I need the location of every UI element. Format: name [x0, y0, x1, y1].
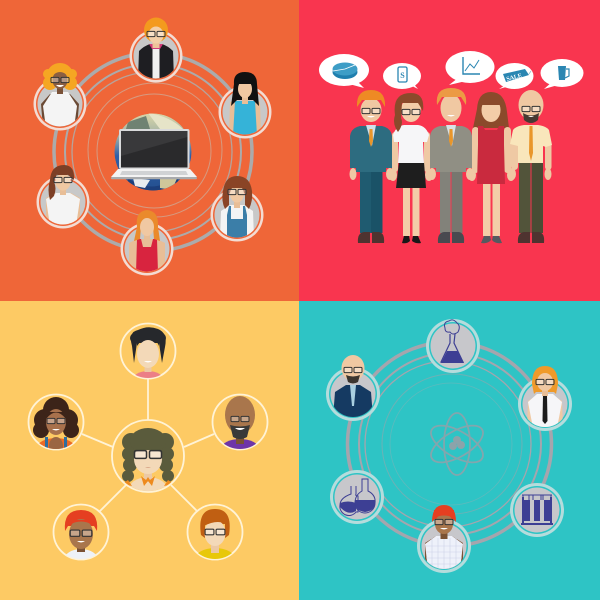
icon: globe — [114, 113, 192, 194]
person: man in grey suit — [428, 88, 474, 243]
person: bald man with orange tie — [508, 90, 552, 243]
avatar: woman in black jacket — [130, 18, 182, 82]
avatar: woman with curly blonde hair — [34, 63, 86, 130]
panel: red background — [299, 0, 600, 301]
speech bubble: mug — [540, 59, 584, 89]
avatar: man with red hair in checked shirt — [417, 505, 471, 573]
avatar: bald man in navy suit — [326, 355, 380, 421]
panel: orange background — [0, 0, 299, 301]
speech bubble: phone with S: S — [400, 71, 405, 80]
icon: laptop — [111, 129, 197, 179]
avatar: woman in shirt and black tie — [518, 366, 572, 431]
concentric network rings — [348, 342, 552, 546]
icon circle: erupting flask — [426, 319, 480, 373]
avatar: woman in red dress — [120, 210, 174, 276]
avatar: woman with black hair in blue top — [218, 72, 272, 138]
avatar: central woman with olive hair — [111, 419, 185, 493]
avatar: person with auburn hair and yellow top — [188, 504, 242, 570]
avatar: man with black hair — [120, 322, 176, 380]
panel: yellow background — [0, 301, 299, 600]
panel: science team network — [326, 319, 572, 573]
speech bubble: sale tag: SALE — [506, 73, 523, 83]
avatar: woman with brown ponytail in white shirt — [36, 165, 90, 228]
network connector lines — [82, 379, 214, 511]
avatar: bald man with goatee — [212, 394, 268, 459]
avatar: woman with curly dark hair — [28, 394, 84, 458]
panel: global network of women — [34, 18, 272, 276]
person: man in teal suit — [350, 90, 394, 243]
panel: business team with speech bubbles — [319, 51, 584, 243]
person: woman in red dress — [468, 92, 515, 243]
icon circle: test tubes rack — [510, 483, 564, 537]
speech bubble: phone with S — [383, 63, 421, 89]
panel: social network of avatars — [28, 324, 268, 571]
speech bubble: line chart — [446, 51, 494, 85]
speech bubble: sale tag — [496, 63, 534, 89]
panel: teal background — [299, 301, 600, 600]
avatar: woman in blue overalls — [210, 176, 264, 242]
person: woman in white blouse and black skirt — [389, 93, 433, 243]
avatar: man with red hair and white shirt — [52, 504, 110, 560]
concentric network rings — [54, 53, 252, 251]
icon: atom — [425, 413, 489, 475]
icon circle: two flasks — [330, 470, 384, 524]
speech bubble: pie chart — [319, 54, 369, 88]
